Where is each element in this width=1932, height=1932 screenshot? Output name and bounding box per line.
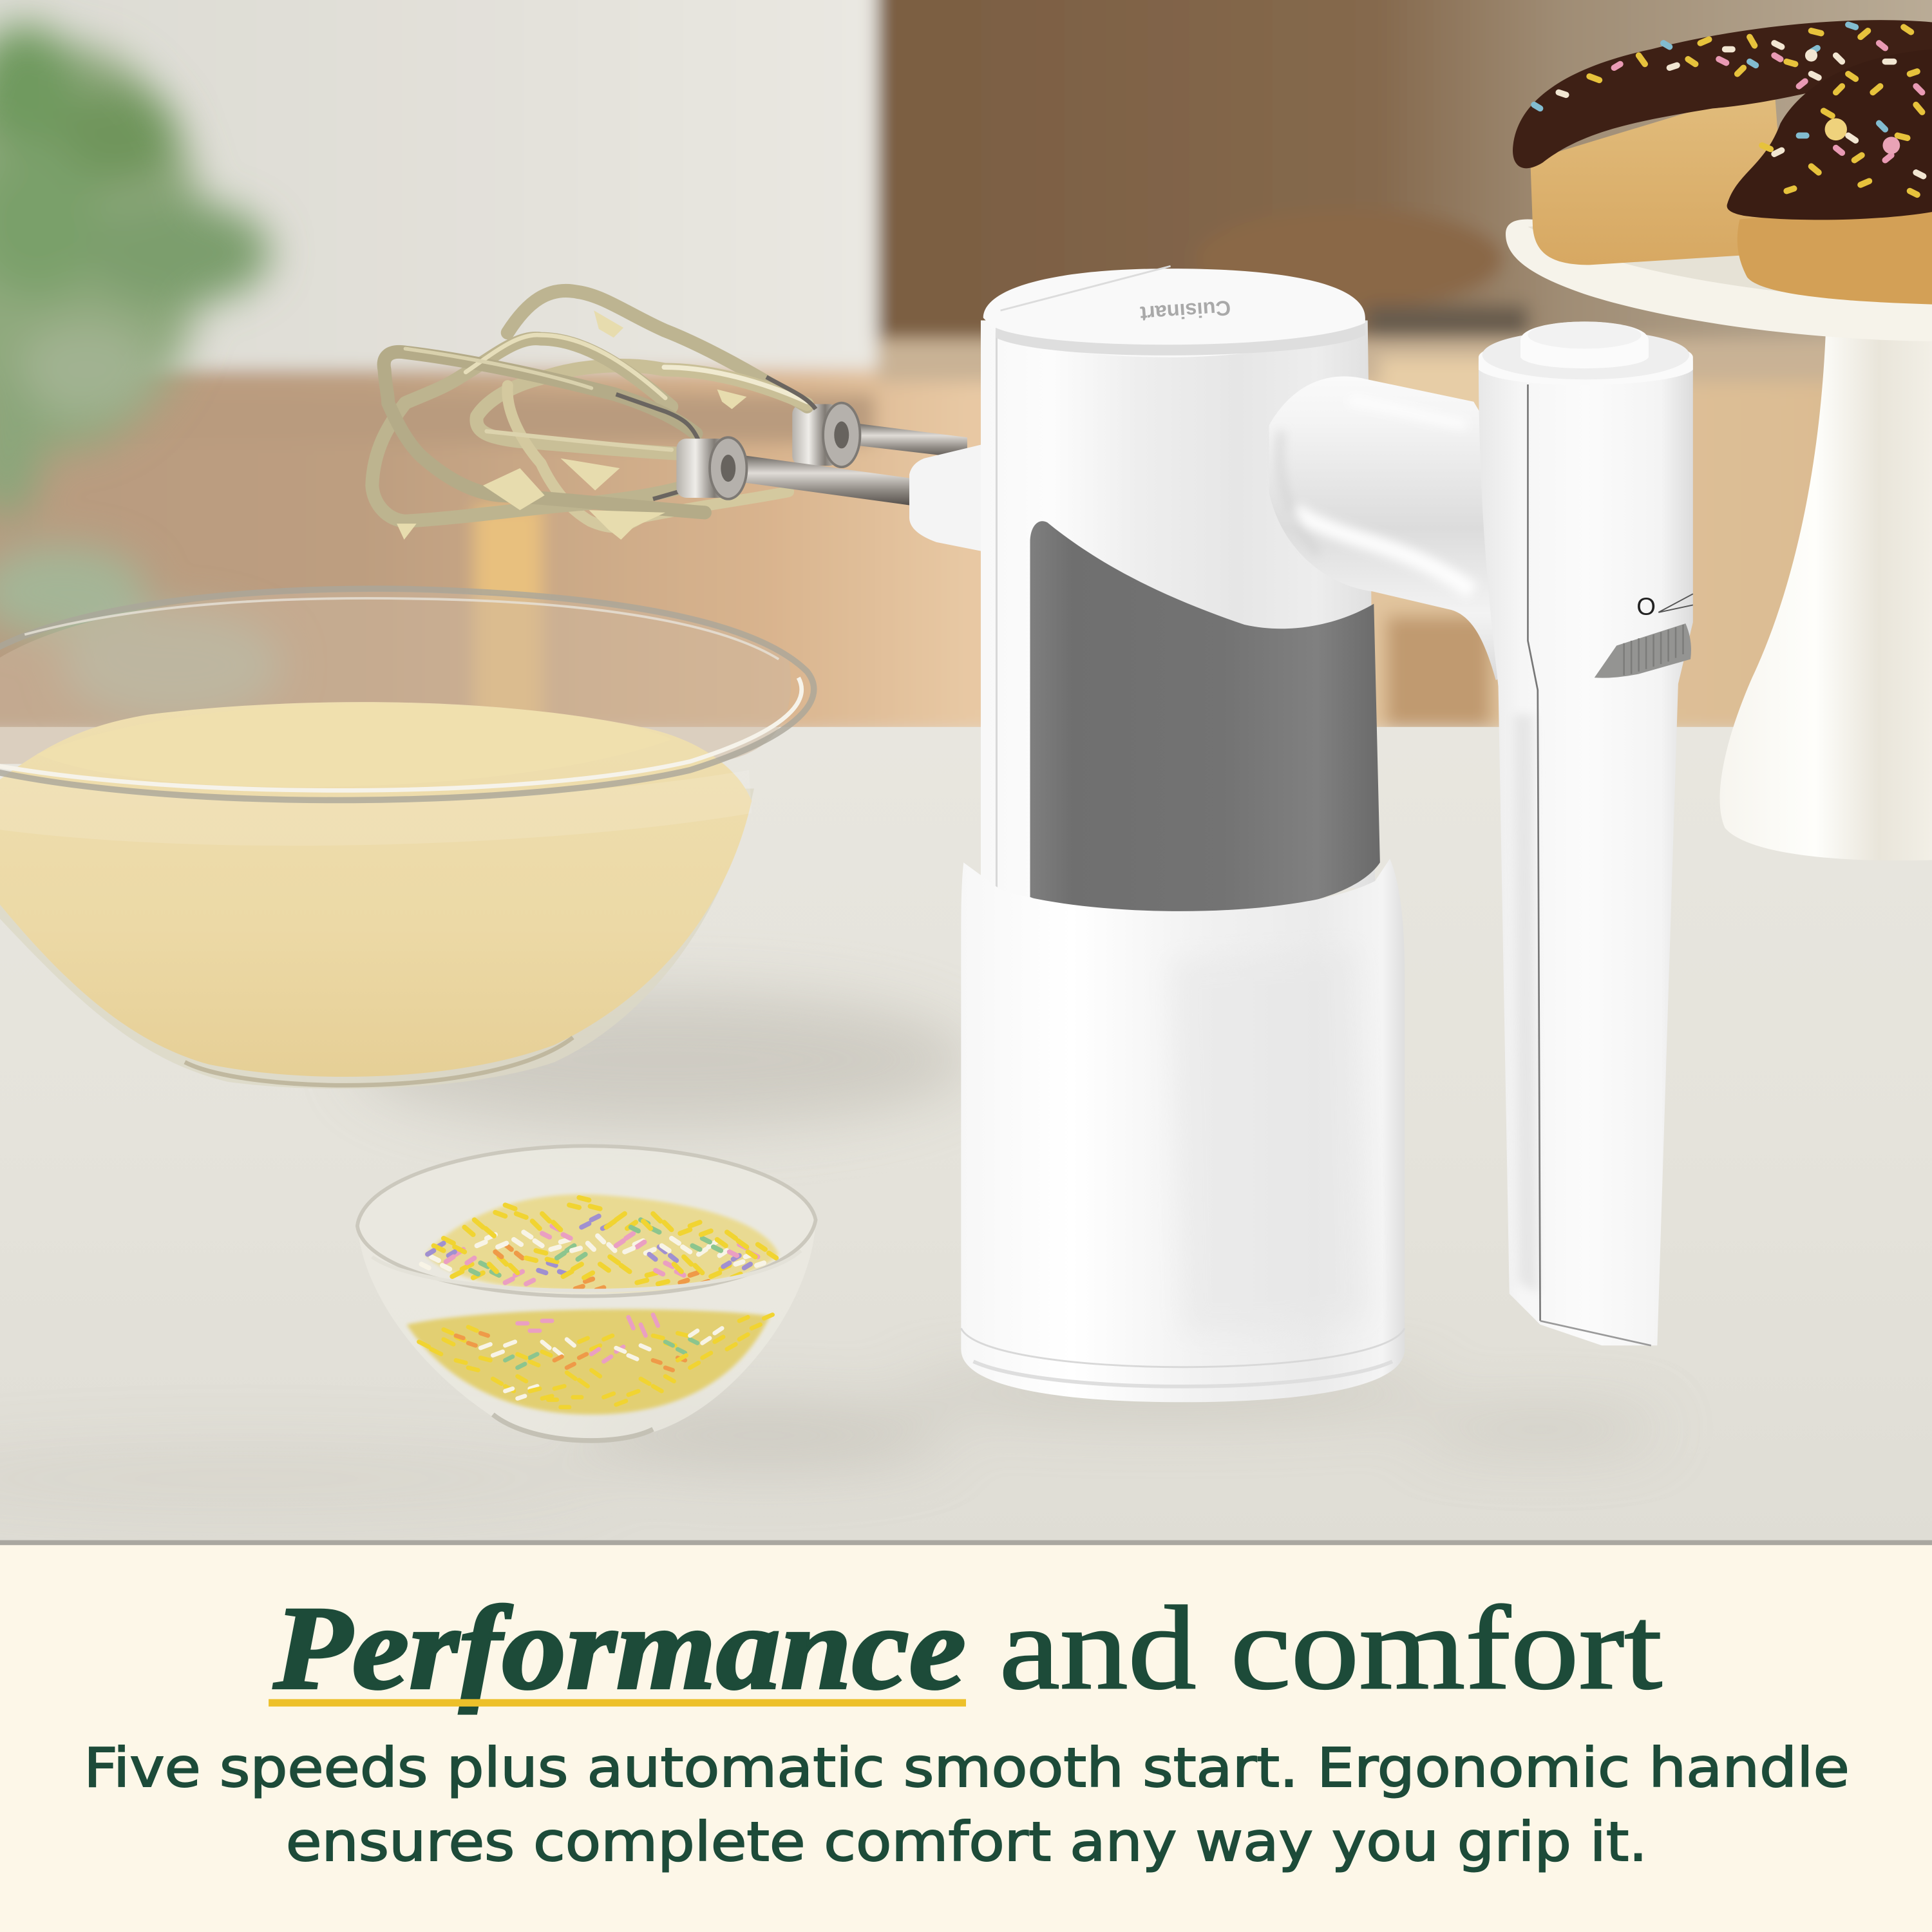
bowl foot <box>185 1037 573 1085</box>
small bowl glass <box>357 1146 816 1440</box>
stand pedestal <box>1720 323 1932 860</box>
countertop <box>0 727 1932 1545</box>
sprinkle pieces <box>419 1198 776 1407</box>
body text <box>84 1736 1850 1873</box>
batter <box>0 702 752 1077</box>
brand wordmark: Cuisinart <box>1139 296 1231 326</box>
heading: and comfort <box>999 1582 1662 1714</box>
bowl body <box>0 788 754 1089</box>
power button <box>1520 321 1649 368</box>
handle grip <box>1479 361 1693 1345</box>
hand mixer <box>909 266 1693 1402</box>
cake stand <box>1506 219 1932 860</box>
back cake slice <box>1530 86 1786 265</box>
grip top cap <box>1479 330 1693 385</box>
grip seam <box>1528 384 1540 1321</box>
dark wire ends <box>616 377 816 499</box>
cake <box>1513 20 1932 305</box>
back shaft <box>840 421 967 459</box>
mixer handle neck <box>1269 376 1528 680</box>
top cap <box>983 266 1365 357</box>
front collar <box>676 437 746 499</box>
back glass of bowl <box>0 591 791 764</box>
speed mark <box>1636 593 1693 621</box>
photo panel: kitchen scene <box>0 0 1932 1545</box>
heading <box>273 1582 1662 1714</box>
stand plate <box>1506 219 1932 341</box>
counter shadows <box>374 977 1608 1479</box>
batter surface <box>37 704 672 787</box>
mixer motor body <box>981 320 1375 900</box>
body text: ensures complete comfort any way you grip it. <box>286 1810 1647 1873</box>
base cup <box>961 859 1405 1402</box>
body text: Five speeds plus automatic smooth start. Ergonomic handle <box>84 1736 1850 1799</box>
batter drips <box>397 310 746 540</box>
speed mark: O <box>1636 593 1656 621</box>
large glass mixing bowl <box>0 589 814 1089</box>
blurred plant <box>0 24 283 721</box>
neck highlights <box>1280 401 1472 591</box>
bottom text panel <box>0 1545 1932 1932</box>
back chocolate frosting <box>1513 20 1932 168</box>
base cup shading <box>1171 949 1368 1333</box>
bowl front glass band <box>0 770 752 846</box>
small bowl rim <box>357 1146 816 1296</box>
gray panel <box>1030 521 1380 914</box>
small glass bowl of sprinkles <box>357 1146 816 1441</box>
front cake slice <box>1738 204 1932 305</box>
blurred kitchen background <box>0 0 1932 727</box>
front shaft <box>730 453 909 505</box>
sprinkle mass <box>406 1195 779 1414</box>
whisk beaters <box>372 290 967 540</box>
cake sprinkles <box>1534 24 1924 194</box>
heading: Performance <box>273 1582 966 1714</box>
grip shading <box>1513 715 1538 1294</box>
back collar <box>792 403 860 467</box>
batter coated wires <box>372 290 807 527</box>
speed dial <box>1595 623 1691 678</box>
front chocolate frosting <box>1727 50 1932 220</box>
beater socket nub <box>909 444 986 552</box>
bowl rim <box>0 589 814 800</box>
heading underline <box>269 1699 966 1707</box>
